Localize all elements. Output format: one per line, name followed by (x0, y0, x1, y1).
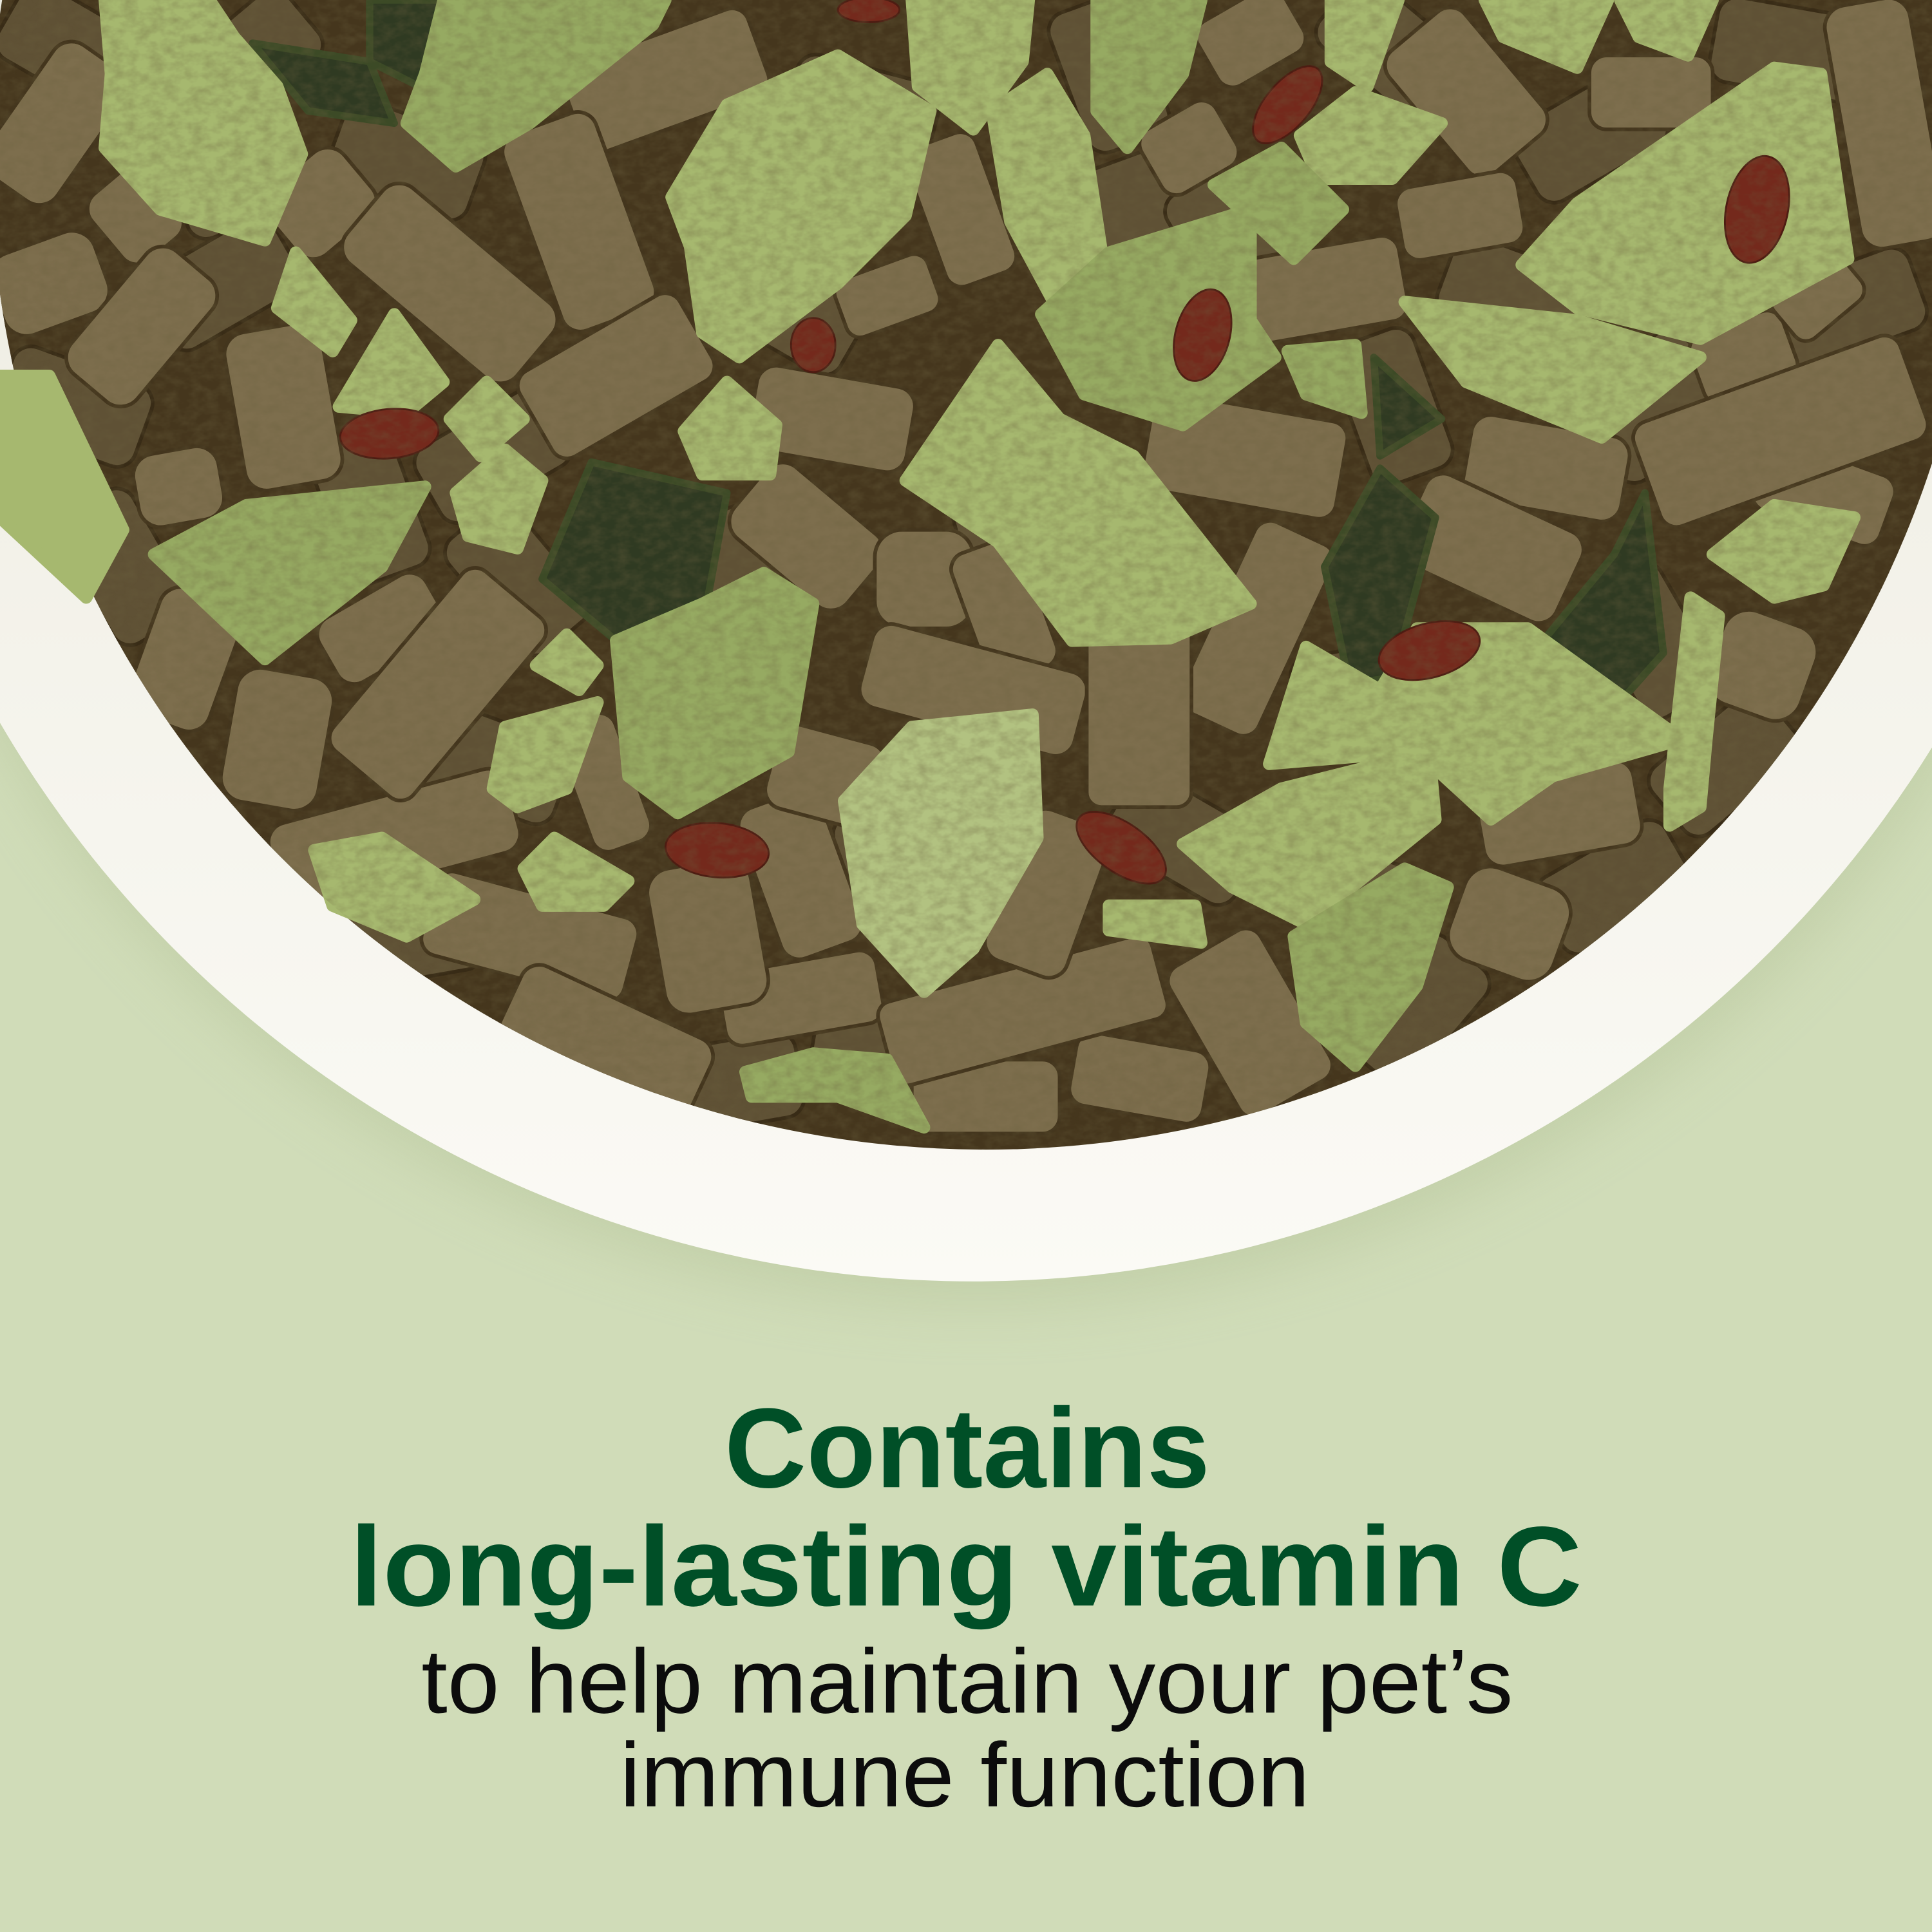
green vegetable flakes (105, 0, 1854, 1128)
headline (350, 1385, 1582, 1630)
headline: long-lasting vitamin C (350, 1504, 1582, 1630)
flax seeds (338, 0, 1799, 898)
body text: immune function (620, 1725, 1310, 1826)
food texture (0, 0, 1932, 1158)
bowl shadow (0, 0, 1932, 1306)
dark seaweed pieces (252, 0, 1663, 708)
white bowl (0, 0, 1932, 1282)
body text (421, 1631, 1513, 1826)
left flake overlapping the bowl rim (0, 376, 123, 598)
headline: Contains (724, 1385, 1210, 1511)
background layer of pellets (0, 0, 1932, 1140)
pet food pellets (0, 0, 1932, 1136)
body text: to help maintain your pet’s (421, 1631, 1513, 1732)
